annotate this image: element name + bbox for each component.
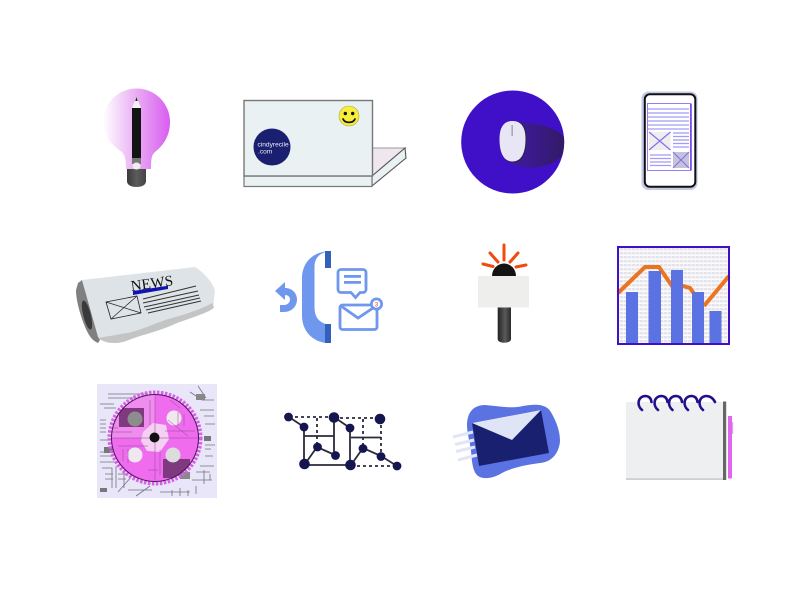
icon: light bulb with pencil	[103, 88, 170, 187]
icon: envelope on blue blob	[453, 405, 560, 478]
icon: circuit board with magenta disc	[97, 384, 217, 498]
chart: bars with orange trend line	[618, 247, 729, 344]
icon: laptop with stickers	[244, 100, 406, 186]
icon: envelope with badge: 3	[375, 302, 379, 308]
icon: chat bubble	[338, 270, 366, 298]
diagram: network of nodes	[284, 412, 401, 470]
icon: spiral notebook and pen	[626, 396, 733, 480]
icon: computer mouse on purple circle	[461, 90, 566, 194]
headline: NEWS: NEWS	[130, 273, 174, 295]
pen	[728, 416, 733, 478]
disc with toothed edge	[110, 392, 200, 484]
sticker: cindyrecile.com: .com	[258, 148, 273, 156]
icon: reporter microphone	[478, 245, 529, 343]
sticker: cindyrecile.com	[254, 128, 290, 166]
icon: rolled newspaper	[76, 267, 215, 343]
arrow: call back	[275, 282, 297, 312]
sticker: smiley	[339, 106, 359, 126]
icon: smartphone wireframe	[642, 92, 698, 190]
icon: phone, message and mail	[275, 251, 383, 343]
sticker: cindyrecile.com: cindyrecile	[258, 142, 289, 148]
